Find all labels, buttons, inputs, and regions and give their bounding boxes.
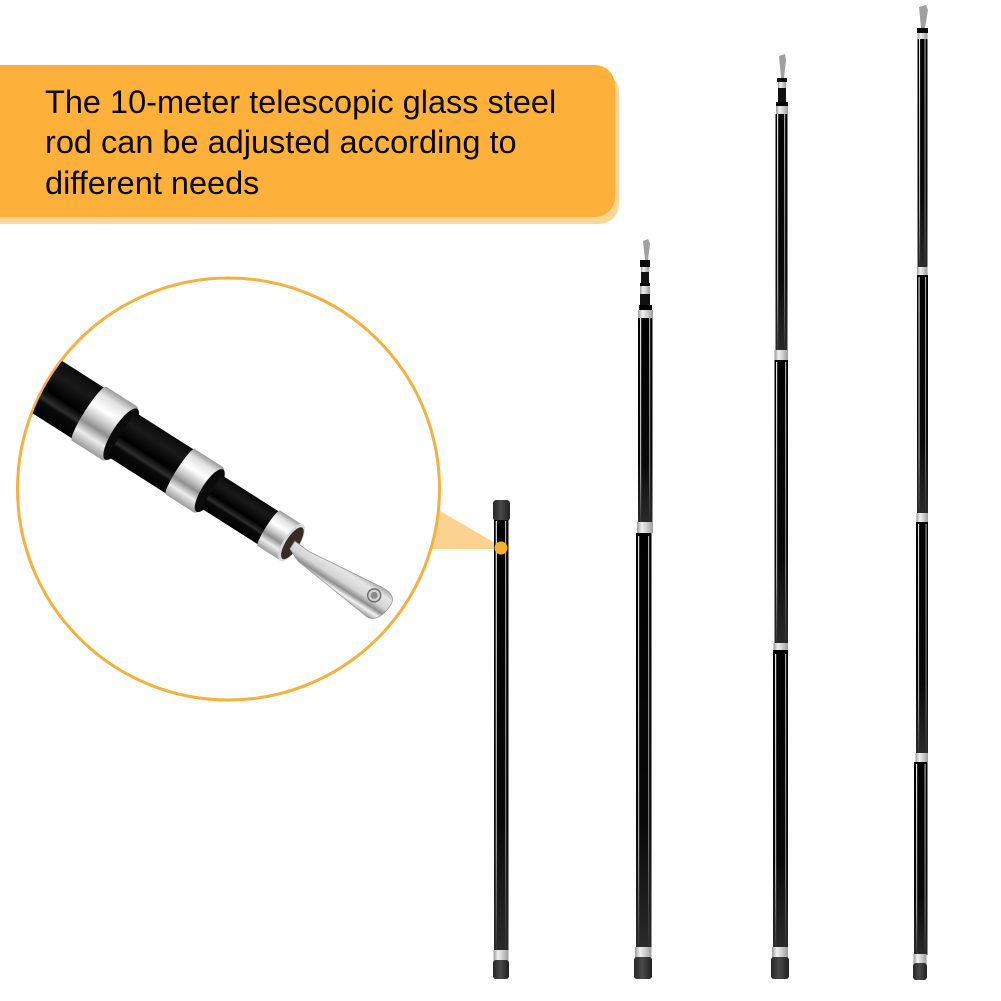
rod 2 upper section bbox=[638, 318, 652, 523]
rod 2 base cap bbox=[634, 957, 652, 979]
orange marker dot bbox=[494, 542, 508, 554]
rod 3 upper section bbox=[776, 114, 788, 351]
rod 3: further extended bbox=[771, 54, 789, 979]
banner text: different needs bbox=[45, 165, 259, 201]
rod 4 base cap bbox=[913, 963, 927, 980]
thin rod segment bbox=[201, 475, 279, 545]
rod 3 base cap bbox=[771, 957, 789, 979]
metal eyelet tip bbox=[290, 540, 393, 619]
banner text: rod can be adjusted according to bbox=[45, 124, 517, 160]
middle rod segment bbox=[107, 412, 196, 495]
magnifier circle: rod tip detail bbox=[0, 278, 439, 700]
banner text: The 10-meter telescopic glass steel bbox=[45, 84, 556, 120]
rod 1 top cap bbox=[493, 500, 510, 521]
banner shadow bbox=[0, 72, 619, 224]
rod 1: fully collapsed bbox=[493, 500, 510, 979]
rod 4 ring two bbox=[916, 513, 928, 522]
callout banner bbox=[0, 65, 619, 224]
upper ring bbox=[71, 386, 139, 460]
rod 4 third section bbox=[916, 522, 928, 754]
banner panel bbox=[0, 65, 615, 217]
rod 4 ring one bbox=[917, 267, 928, 275]
rod 3 base ring bbox=[772, 947, 788, 960]
rod 3 tip bbox=[779, 54, 786, 78]
callout pointer from rod to magnifier bbox=[432, 511, 495, 549]
rod 4: fully extended bbox=[913, 5, 928, 980]
rod 1 base ring bbox=[494, 950, 508, 962]
thick rod segment bbox=[32, 361, 104, 438]
rod 4 ring three bbox=[916, 753, 928, 762]
rod 3 middle section bbox=[774, 360, 788, 644]
rod 2: partly extended bbox=[634, 239, 653, 979]
rod 2 middle ring bbox=[637, 522, 653, 533]
middle ring bbox=[165, 448, 225, 513]
rod 4 second section bbox=[917, 275, 928, 514]
rod 4 top section bbox=[918, 39, 928, 268]
rod 3 ring one bbox=[774, 350, 788, 360]
rod 4 tip bbox=[919, 5, 928, 28]
rod 2 lower section bbox=[636, 533, 652, 948]
rod 3 lower section bbox=[773, 650, 788, 948]
rod 4 base ring bbox=[914, 954, 926, 965]
rod 1 base cap bbox=[493, 960, 509, 979]
rod 2 base ring bbox=[635, 947, 652, 960]
rod 3 ring two bbox=[774, 643, 788, 651]
rod 4 lower section bbox=[914, 762, 928, 955]
rod 2 tip bbox=[643, 239, 650, 260]
end ring bbox=[257, 510, 305, 562]
